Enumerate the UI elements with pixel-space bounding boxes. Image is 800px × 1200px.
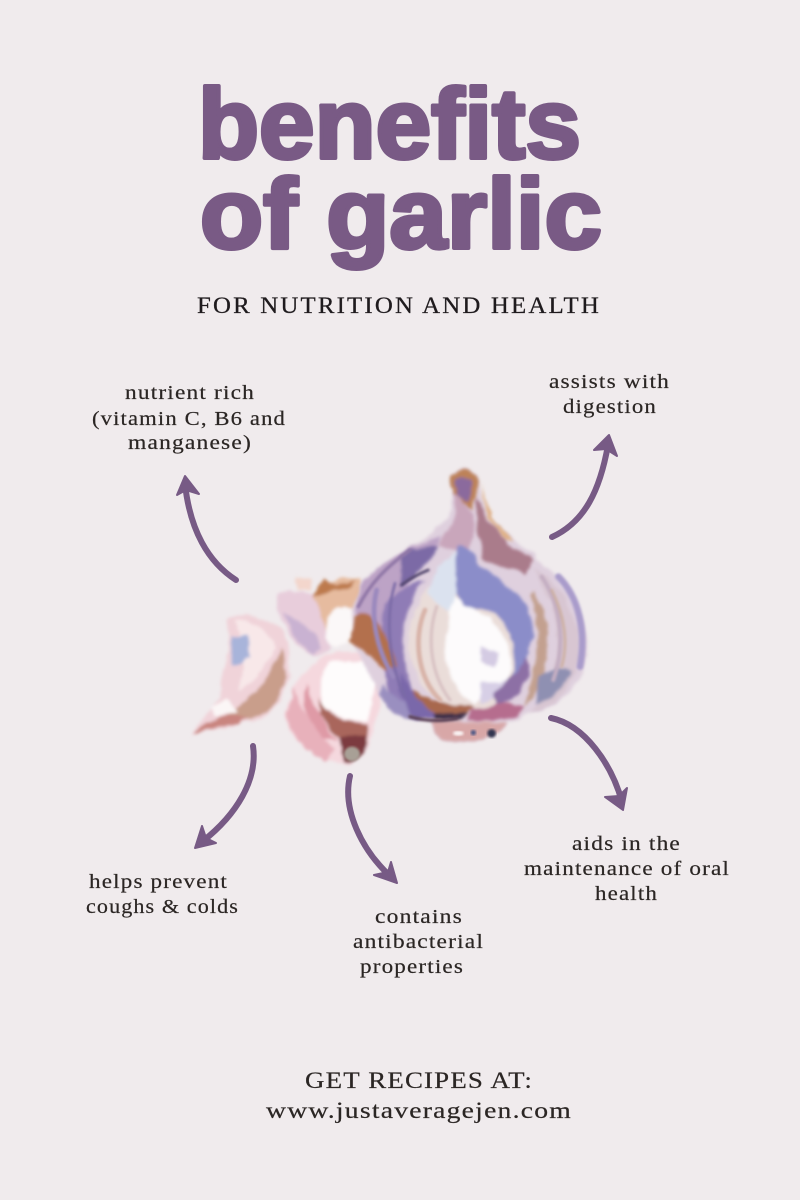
label: contains antibacterial properties: properties (360, 956, 464, 978)
stem (451, 470, 478, 510)
centre clove (409, 574, 520, 711)
base shadow (413, 690, 473, 718)
brush striations (358, 550, 582, 720)
label: helps prevent coughs and colds: coughs & colds (86, 896, 239, 918)
bulb (350, 469, 587, 742)
right stripes (530, 567, 580, 713)
title: benefits (198, 68, 581, 179)
label: contains antibacterial properties: antibacterial (353, 931, 484, 953)
label: contains antibacterial properties: contains (375, 906, 463, 928)
left shell (356, 535, 443, 663)
arrow: to nutrient rich (177, 476, 236, 580)
brown husk over bulb edge (350, 612, 397, 672)
label: oral health (524, 833, 730, 905)
arrow: to coughs and colds (195, 746, 254, 848)
illustration: watercolour garlic (192, 469, 587, 765)
label: nutrient rich: manganese) (128, 432, 252, 454)
loose cloves (192, 577, 387, 765)
blue wash (455, 545, 533, 695)
title (198, 68, 602, 269)
label: helps prevent coughs and colds (86, 871, 239, 918)
arrow: to oral health (551, 718, 627, 810)
footer call to action: www.justaveragejen.com (266, 1098, 572, 1123)
label: contains antibacterial properties (353, 906, 484, 978)
footer call to action (266, 1068, 572, 1123)
subtitle: FOR NUTRITION AND HEALTH (197, 293, 601, 318)
label: nutrient rich (92, 382, 286, 454)
label: nutrient rich: (vitamin C, B6 and (92, 408, 286, 430)
label: nutrient rich: nutrient rich (125, 382, 255, 404)
label: assists with digestion (549, 371, 670, 418)
label: oral health: maintenance of oral (524, 858, 730, 880)
arrow: to digestion (552, 435, 617, 537)
label: assists with digestion: assists with (549, 371, 670, 393)
label: oral health: aids in the (572, 833, 681, 855)
label: assists with digestion: digestion (563, 396, 657, 418)
arrow: to antibacterial (348, 776, 397, 883)
label: helps prevent coughs and colds: helps prevent (89, 871, 228, 893)
title: of garlic (200, 158, 602, 269)
label: oral health: health (595, 883, 658, 905)
footer call to action: GET RECIPES AT: (305, 1068, 533, 1093)
